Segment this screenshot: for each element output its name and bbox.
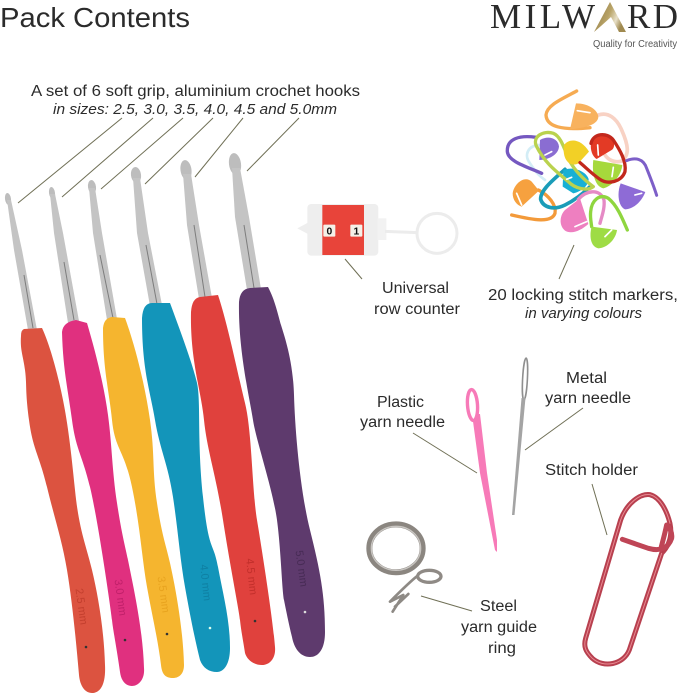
- holder outer wire: [585, 495, 671, 664]
- green marker body: [590, 227, 617, 248]
- logo: Milward: [490, 0, 678, 50]
- green marker loop: [590, 197, 627, 230]
- counter collar: [378, 218, 386, 240]
- plastic needle label: yarn needle: [360, 414, 445, 431]
- digit 1: 1: [353, 226, 359, 237]
- hook 3.5mm: 3.5 mm: [154, 576, 171, 614]
- icon: stitch markers: [507, 91, 657, 248]
- stitch markers label: [488, 287, 678, 322]
- digit window 1: [350, 225, 362, 237]
- ring band highlight: [371, 526, 421, 570]
- hook 3.0mm: [48, 187, 144, 686]
- yarn guide ring label: Steel: [480, 598, 517, 615]
- metal needle shaft: [512, 398, 526, 515]
- pink marker stem: [578, 192, 604, 223]
- heading line: A set of 6 soft grip, aluminium crochet hooks: [31, 83, 360, 100]
- red marker body: [591, 134, 614, 159]
- plastic needle shaft: [472, 414, 497, 552]
- metal needle eye: [522, 358, 528, 400]
- counter tip: [297, 223, 308, 234]
- yellow marker body: [564, 140, 589, 165]
- leader: stitch holder: [592, 484, 607, 535]
- icon: plastic needle: [466, 389, 497, 552]
- plastic needle eye: [466, 389, 479, 421]
- plastic needle label: Plastic: [377, 394, 424, 411]
- logo gold A: [594, 2, 626, 32]
- icon: stitch holder: [585, 495, 672, 664]
- marker tab details: [517, 111, 642, 237]
- pale pink marker: [598, 114, 627, 162]
- orange top marker body: [570, 103, 598, 129]
- row counter label: [374, 280, 460, 318]
- row counter label: row counter: [374, 301, 460, 318]
- hook 2.5mm: [4, 193, 105, 693]
- ring coil: [418, 570, 441, 582]
- leader: metal needle: [525, 408, 583, 450]
- counter stem: [385, 231, 417, 233]
- counter red band: [322, 205, 364, 255]
- yarn guide ring label: yarn guide: [461, 619, 537, 636]
- pale blue marker: [527, 145, 545, 180]
- teal marker body: [563, 169, 589, 193]
- red marker loop: [580, 135, 625, 182]
- orange left marker body: [513, 179, 539, 207]
- hook 4.5mm: [179, 159, 275, 665]
- hooks heading: [31, 83, 360, 118]
- icon: yarn guide ring: [369, 524, 441, 612]
- purple right marker body: [619, 183, 645, 209]
- icon: metal needle: [512, 358, 528, 515]
- metal needle label: yarn needle: [545, 390, 631, 407]
- ring wire: [390, 576, 417, 612]
- digit window 0: [323, 225, 335, 237]
- holder wire highlight: [585, 495, 670, 664]
- orange left marker stem: [512, 190, 555, 220]
- teal marker stem: [541, 169, 590, 208]
- purple left marker stem: [507, 137, 542, 173]
- purple right marker stem: [627, 159, 657, 195]
- holder clasp: [622, 525, 672, 550]
- orange top marker stem: [546, 91, 590, 129]
- leader: yarn guide ring: [421, 596, 472, 611]
- row counter label: Universal: [382, 280, 449, 297]
- hook 3.5mm: [87, 180, 184, 678]
- label line 1: 20 locking stitch markers,: [488, 287, 678, 304]
- yarn guide ring label: [461, 598, 537, 657]
- leader lines to hooks: [18, 118, 299, 203]
- leader: stitch markers: [559, 245, 574, 279]
- purple left marker body: [539, 138, 559, 160]
- hook 4.5mm: 4.5 mm: [243, 558, 259, 596]
- digit 0: 0: [326, 226, 332, 237]
- yarn guide ring label: ring: [488, 640, 516, 657]
- counter body: [307, 204, 378, 256]
- ring band: [369, 524, 423, 572]
- plastic needle label: [360, 394, 445, 431]
- leader: row counter: [345, 259, 362, 279]
- metal needle label: Metal: [566, 370, 607, 387]
- label line 2: in varying colours: [525, 306, 642, 322]
- hook 4.0mm: [130, 166, 230, 672]
- sizes line: in sizes: 2.5, 3.0, 3.5, 4.0, 4.5 and 5.0mm: [53, 102, 337, 118]
- green centre marker body: [593, 160, 622, 188]
- lime marker loop: [535, 132, 593, 189]
- hook 5.0mm: [228, 152, 325, 657]
- stitch holder label: Stitch holder: [545, 462, 638, 479]
- title: Pack Contents: [0, 2, 190, 33]
- counter ring: [417, 213, 457, 253]
- hook 5.0mm: 5.0 mm: [292, 550, 309, 588]
- metal needle label: [545, 370, 631, 407]
- leader: plastic needle: [413, 433, 477, 473]
- hook 3.0mm: 3.0 mm: [111, 579, 128, 617]
- pink marker body: [561, 198, 588, 232]
- hook 4.0mm: 4.0 mm: [197, 564, 213, 602]
- hook 2.5mm: 2.5 mm: [72, 588, 89, 626]
- icon: row counter: [297, 204, 457, 256]
